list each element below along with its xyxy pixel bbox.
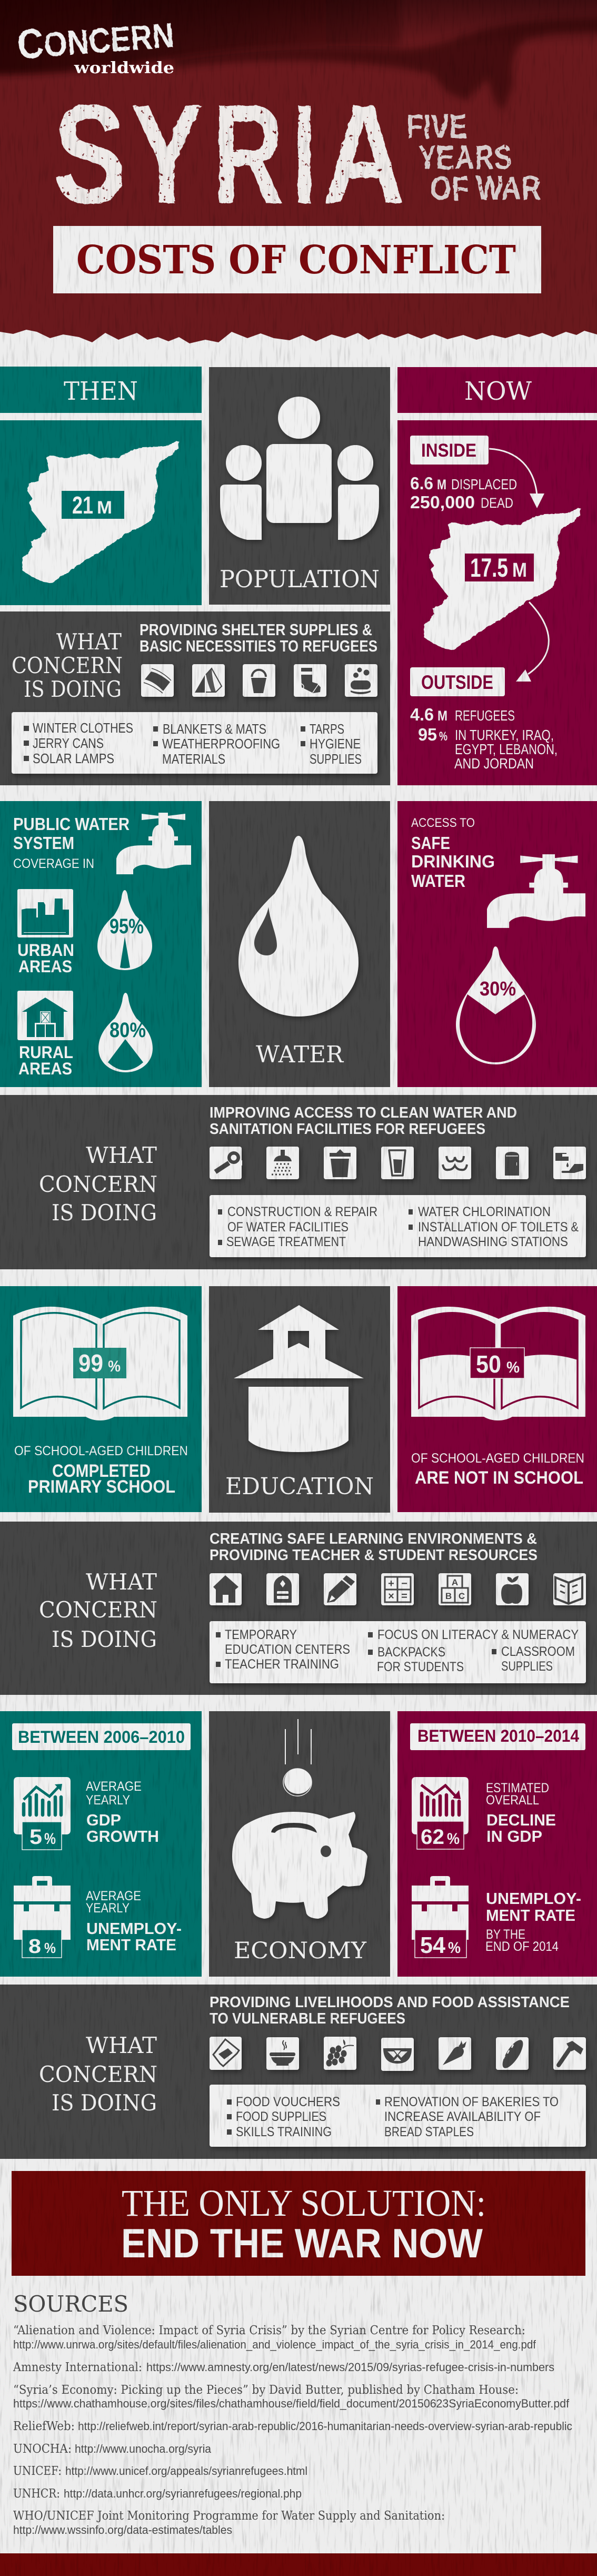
- subheading: safe learning: [210, 1531, 538, 1564]
- icon: briefcase with 54%: %: [448, 1939, 461, 1957]
- text: unemployment rate: [485, 1889, 581, 1954]
- text: decline in GDP: IN GDP: [486, 1827, 542, 1845]
- stat: 21M: 21: [72, 491, 93, 519]
- text: not in school: ARE NOT IN SCHOOL: [415, 1468, 583, 1488]
- panel: population: [209, 367, 390, 605]
- icon: citrus slice: [381, 2038, 414, 2071]
- chart: 95% drop: 95%: [110, 915, 144, 938]
- icon: jerry can: [324, 1147, 356, 1179]
- icon: briefcase with 54%: [412, 1876, 469, 1958]
- stats: displaced and dead: [410, 473, 517, 512]
- icon: briefcase with 8%: [14, 1876, 71, 1958]
- text: completed primary school: COMPLETED: [52, 1461, 151, 1481]
- list box: water: [210, 1195, 586, 1257]
- heading: public water system: [13, 814, 130, 871]
- heading: safe drinking water: ACCESS TO: [411, 816, 475, 830]
- label: outside: [410, 667, 505, 696]
- text block: source list: WHO/UNICEF Joint Monitoring Programme for Water Supply and Sanitation:: [13, 2509, 445, 2523]
- label: outside: OUTSIDE: [421, 672, 493, 693]
- text block: source list: ReliefWeb:: [13, 2420, 75, 2433]
- text: decline in GDP: [486, 1781, 556, 1845]
- icon: sock: [294, 664, 326, 697]
- heading: what concern is doing: CONCERN: [39, 1171, 157, 1197]
- text block: source list: UNOCHA:: [13, 2442, 72, 2456]
- list box: water: OF WATER FACILITIES: [227, 1220, 349, 1235]
- icon: city: [17, 889, 73, 937]
- list box: food: BREAD STAPLES: [384, 2125, 474, 2139]
- panel: then education: [0, 1286, 202, 1512]
- list box: education: TEACHER TRAINING: [225, 1657, 339, 1672]
- icon: briefcase with 8%: 8: [28, 1936, 41, 1958]
- icon: alphabet blocks: C: [459, 1591, 465, 1601]
- heading: sources: SOURCES: [13, 2291, 128, 2317]
- icon: water waves: [439, 1147, 471, 1179]
- list box: water: SEWAGE TREATMENT: [226, 1235, 346, 1249]
- heading: public water system: PUBLIC WATER: [13, 814, 130, 834]
- stat: 99%: 99: [78, 1349, 103, 1377]
- column header: then: [0, 367, 202, 413]
- text: GDP growth: YEARLY: [86, 1793, 130, 1808]
- stats: refugees: M: [437, 708, 447, 724]
- map: Syria 17.5M: [424, 508, 581, 650]
- label: between 2006-2010: BETWEEN 2006–2010: [18, 1728, 185, 1746]
- costs of conflict title box: [53, 226, 541, 293]
- list box: food: FOOD SUPPLIES: [236, 2109, 326, 2124]
- icon: water drop: [238, 836, 359, 1016]
- stat: 99%: [73, 1348, 126, 1378]
- icon: three people: [220, 397, 379, 540]
- list box: education: BACKPACKS: [377, 1645, 445, 1660]
- text: decline in GDP: DECLINE: [486, 1811, 556, 1829]
- list box: water: HANDWASHING STATIONS: [418, 1235, 568, 1249]
- text: GDP growth: [86, 1779, 159, 1845]
- subtitle: five years of war: [406, 107, 541, 207]
- column header: now: NOW: [464, 377, 532, 406]
- heading: what concern is doing: WHAT: [56, 629, 122, 655]
- label: urban areas: URBAN: [17, 941, 74, 960]
- text: unemployment rate: END OF 2014: [485, 1939, 559, 1954]
- heading: safe drinking water: [411, 816, 495, 891]
- panel: education: [209, 1286, 390, 1513]
- list box: water: INSTALLATION OF TOILETS &: [418, 1220, 579, 1235]
- heading: public water system: COVERAGE IN: [13, 856, 94, 871]
- chart: 80% drop: [98, 993, 153, 1072]
- title: Syria: Y: [131, 75, 203, 233]
- icon: soap: [345, 664, 377, 697]
- icon: briefcase with 54%: 54: [420, 1932, 446, 1958]
- panel: economy: ECONOMY: [234, 1938, 367, 1964]
- panel: now water: [397, 801, 597, 1087]
- icon: grapes: [324, 2037, 356, 2070]
- icon: wrench: [210, 1147, 242, 1179]
- icon: open book: [13, 1307, 187, 1420]
- text: decline in GDP: ESTIMATED: [486, 1781, 549, 1795]
- text: unemployment rate: MENT RATE: [86, 1936, 176, 1954]
- icon: math symbols: −: [401, 1578, 407, 1590]
- icon: growth chart with 5%: [14, 1777, 71, 1850]
- list box: shelter supplies: WEATHERPROOFING: [162, 736, 280, 752]
- text: GDP growth: AVERAGE: [86, 1779, 142, 1794]
- subheading: shelter supplies: BASIC NECESSITIES TO REFUGEES: [140, 637, 377, 655]
- icon: school: [234, 1305, 364, 1452]
- subtitle: five years of war: OF WAR: [430, 169, 541, 207]
- panel: water: WATER: [256, 1041, 344, 1068]
- stats: refugees: AND JORDAN: [454, 755, 534, 772]
- arrow: map to outside: [516, 602, 549, 682]
- subheading: livelihoods: TO VULNERABLE REFUGEES: [210, 2010, 405, 2027]
- chart: 80% drop: 80%: [110, 1019, 146, 1042]
- icon: piggy bank: [232, 1812, 367, 1919]
- text block: source list: http://www.unrwa.org/sites/default/files/alienation_and_violence_impact_of_the_syria_crisis_in_2014_eng.pdf: [13, 2338, 536, 2351]
- heading: what concern is doing: [39, 1569, 157, 1652]
- subheading: clean water: [210, 1104, 517, 1138]
- list box: shelter supplies: WINTER CLOTHES: [33, 720, 133, 736]
- logo: CONCERN: [15, 9, 175, 68]
- list box: education: FOR STUDENTS: [377, 1660, 464, 1674]
- heading: what concern is doing: CONCERN: [12, 653, 123, 678]
- icon: tent: [192, 664, 225, 697]
- stat: 21M: M: [97, 498, 112, 518]
- stats: refugees: IN TURKEY, IRAQ,: [455, 727, 554, 743]
- subheading: livelihoods: [210, 1994, 570, 2027]
- panel: what concern is doing, shelter: [0, 611, 390, 785]
- list box: food: RENOVATION OF BAKERIES TO: [384, 2095, 559, 2109]
- map: Syria 21M: [22, 441, 179, 583]
- list box: shelter supplies: BLANKETS & MATS: [163, 721, 266, 737]
- logo: worldwide: [74, 59, 174, 77]
- stats: refugees: %: [439, 729, 447, 744]
- icon: apple: [496, 1573, 529, 1605]
- subtitle: five years of war: YEARS: [418, 139, 512, 176]
- chart: 30% drop: 30%: [480, 978, 516, 1000]
- list box: shelter supplies: MATERIALS: [162, 751, 225, 767]
- subheading: safe learning: CREATING SAFE LEARNING ENVIRONMENTS &: [210, 1531, 537, 1547]
- panel: then water: [0, 801, 202, 1087]
- subheading: clean water: SANITATION FACILITIES FOR REFUGEES: [210, 1121, 485, 1138]
- subtitle: five years of war: FIVE: [406, 107, 467, 145]
- text block: source list: UNHCR:: [13, 2487, 60, 2501]
- title: Syria: [53, 75, 405, 233]
- stat: 17.5M: 17.5: [470, 553, 508, 583]
- text block: source list: https://www.amnesty.org/en/latest/news/2015/09/syrias-refugee-crisis-in-numbers: [146, 2361, 554, 2374]
- icon: alphabet blocks: A: [452, 1577, 458, 1587]
- chart: 30% drop: [456, 946, 536, 1064]
- text: not in school: [411, 1451, 584, 1488]
- heading: public water system: SYSTEM: [13, 833, 74, 853]
- stats: displaced and dead: DISPLACED: [451, 476, 517, 492]
- icon: hand washing: [553, 1147, 586, 1179]
- heading: what concern is doing: IS DOING: [24, 676, 122, 702]
- icon: faucet: [487, 854, 585, 928]
- icon: half-empty book: [411, 1307, 585, 1420]
- panel: population: POPULATION: [220, 565, 380, 593]
- icon: food voucher: [210, 2037, 242, 2070]
- panel: economy: [209, 1711, 390, 1977]
- list box: shelter supplies: SOLAR LAMPS: [33, 751, 114, 766]
- text: decline in GDP: OVERALL: [486, 1793, 539, 1808]
- stat: 50%: 50: [476, 1350, 501, 1378]
- subheading: livelihoods: PROVIDING LIVELIHOODS AND FOOD ASSISTANCE: [210, 1994, 570, 2011]
- label: inside: [410, 436, 489, 465]
- icon: hammer: [553, 2037, 586, 2070]
- heading: what concern is doing: CONCERN: [39, 1597, 157, 1623]
- icon: math symbols: ×: [388, 1591, 394, 1602]
- icon: alphabet blocks: [439, 1573, 471, 1605]
- title: Syria: I: [293, 75, 316, 233]
- stats: displaced and dead: 250,000: [410, 492, 475, 512]
- stat: 99%: %: [108, 1358, 121, 1375]
- text block: source list: “Syria’s Economy: Picking up the Pieces” by David Butter, published by Chatham House:: [13, 2383, 519, 2397]
- list box: shelter supplies: JERRY CANS: [33, 735, 104, 751]
- heading: safe drinking water: DRINKING: [411, 852, 495, 871]
- footer bar: [0, 2553, 597, 2576]
- chart: 95% drop: [97, 890, 152, 970]
- text block: source list: Amnesty International:: [13, 2361, 142, 2374]
- panel: now education: [397, 1286, 597, 1512]
- panel: now population: [397, 420, 597, 785]
- icon: carrot: [439, 2037, 471, 2070]
- text block: source list: https://www.chathamhouse.org/sites/files/chathamhouse/field/field_document/20150623SyriaEconomyButter.pdf: [13, 2397, 570, 2410]
- subheading: shelter supplies: PROVIDING SHELTER SUPPLIES &: [140, 620, 372, 639]
- heading: what concern is doing: [39, 2032, 157, 2116]
- label: rural areas: [18, 1043, 73, 1078]
- callout: end the war now: END THE WAR NOW: [121, 2220, 483, 2266]
- stats: refugees: 95: [418, 725, 437, 744]
- stat: 17.5M: M: [512, 559, 527, 581]
- text: completed primary school: PRIMARY SCHOOL: [28, 1477, 175, 1497]
- icon: decline chart with 62%: 62: [421, 1825, 444, 1849]
- stat: 21M: [62, 491, 124, 519]
- list box: food: SKILLS TRAINING: [236, 2125, 332, 2139]
- icon: bucket: [243, 664, 275, 697]
- label: between 2010-2014: BETWEEN 2010–2014: [417, 1726, 579, 1745]
- label: between 2010-2014: [410, 1723, 585, 1750]
- title: Syria: A: [322, 75, 405, 233]
- text block: source list: “Alienation and Violence: Impact of Syria Crisis” by the Syrian Centre for Policy Research:: [13, 2324, 525, 2337]
- list box: education: TEMPORARY: [225, 1627, 297, 1642]
- list box: shelter supplies: HYGIENE: [310, 736, 361, 752]
- icon: backpack: [266, 1573, 299, 1605]
- text: unemployment rate: UNEMPLOY-: [86, 1919, 182, 1938]
- title: Syria: R: [213, 75, 284, 233]
- heading: what concern is doing: [39, 1142, 157, 1226]
- stats: displaced and dead: M: [437, 477, 446, 492]
- list box: food: FOOD VOUCHERS: [236, 2095, 340, 2109]
- icon: blanket: [141, 664, 174, 697]
- callout: end the war now: [12, 2171, 585, 2276]
- label: between 2006-2010: [12, 1723, 191, 1750]
- icon: house: [210, 1573, 242, 1605]
- subheading: clean water: IMPROVING ACCESS TO CLEAN WATER AND: [210, 1104, 517, 1121]
- panel: water: [209, 801, 390, 1087]
- panel: now economy: [397, 1711, 597, 1977]
- list box: education: EDUCATION CENTERS: [225, 1642, 350, 1657]
- heading: what concern is doing: CONCERN: [39, 2061, 157, 2087]
- panel: then economy: [0, 1711, 202, 1977]
- text: completed primary school: [14, 1444, 188, 1497]
- list box: shelter supplies: [12, 712, 377, 774]
- panel: what concern is doing, livelihoods: [0, 1985, 597, 2159]
- icon: pencil: [324, 1573, 356, 1605]
- subheading: shelter supplies: [140, 620, 377, 655]
- text block: source list: http://reliefweb.int/report/syrian-arab-republic/2016-humanitarian-needs-overview-syrian-arab-republic: [78, 2420, 572, 2433]
- heading: what concern is doing: WHAT: [86, 1569, 157, 1595]
- list box: education: SUPPLIES: [501, 1659, 553, 1674]
- list box: food: INCREASE AVAILABILITY OF: [384, 2109, 541, 2124]
- stat: 50%: %: [506, 1359, 520, 1376]
- text block: source list: http://www.wssinfo.org/data-estimates/tables: [13, 2523, 232, 2536]
- text block: source list: [13, 2324, 572, 2536]
- title: Syria: S: [53, 75, 126, 233]
- icon: briefcase with 8%: %: [44, 1940, 56, 1956]
- stats: refugees: 4.6: [410, 705, 434, 724]
- icon: alphabet blocks: B: [445, 1591, 452, 1601]
- heading: what concern is doing: IS DOING: [52, 1626, 157, 1652]
- icon: growth chart with 5%: %: [44, 1830, 56, 1848]
- subheading: safe learning: PROVIDING TEACHER & STUDENT RESOURCES: [210, 1547, 538, 1564]
- heading: what concern is doing: IS DOING: [52, 1200, 157, 1226]
- header banner: [0, 0, 597, 343]
- text: unemployment rate: AVERAGE: [86, 1889, 141, 1903]
- heading: safe drinking water: WATER: [411, 871, 465, 891]
- label: urban areas: [17, 941, 74, 976]
- list box: water: WATER CHLORINATION: [418, 1205, 551, 1219]
- list box: food: [210, 2085, 586, 2147]
- heading: what concern is doing: IS DOING: [52, 2090, 157, 2116]
- icon: bread: [496, 2037, 529, 2071]
- stat: 50%: [470, 1348, 524, 1378]
- heading: what concern is doing: [12, 629, 123, 702]
- icon: latrine door: [496, 1147, 529, 1179]
- heading: what concern is doing: WHAT: [86, 1142, 157, 1168]
- icon: math symbols: =: [401, 1591, 407, 1602]
- text block: source list: http://www.unicef.org/appeals/syrianrefugees.html: [65, 2464, 307, 2478]
- panel: what concern is doing, education: [0, 1522, 597, 1695]
- icon: decline chart with 62%: %: [447, 1830, 460, 1848]
- heading: safe drinking water: SAFE: [411, 833, 450, 853]
- stats: refugees: REFUGEES: [455, 707, 515, 724]
- stats: displaced and dead: DEAD: [481, 495, 513, 511]
- text: not in school: OF SCHOOL-AGED CHILDREN: [411, 1451, 584, 1466]
- list box: water: CONSTRUCTION & REPAIR: [227, 1205, 377, 1219]
- label: rural areas: RURAL: [19, 1043, 73, 1062]
- dark grime and reaching hand: [0, 0, 597, 112]
- icon: decline chart with 62%: [412, 1777, 469, 1849]
- costs of conflict title box: COSTS OF CONFLICT: [76, 238, 516, 283]
- arrow: inside to map: [489, 449, 544, 508]
- icon: math symbols: +: [388, 1578, 394, 1590]
- text: GDP growth: GDP: [86, 1811, 121, 1829]
- list box: education: CLASSROOM: [501, 1644, 575, 1659]
- icon: growth chart with 5%: 5: [29, 1825, 42, 1849]
- text block: source list: http://www.unocha.org/syria: [75, 2442, 212, 2455]
- label: rural areas: AREAS: [18, 1059, 72, 1078]
- icon: barn: [17, 991, 73, 1040]
- panel: education: EDUCATION: [225, 1473, 374, 1500]
- icon: shower: [266, 1147, 299, 1179]
- text: unemployment rate: [86, 1889, 182, 1954]
- label: urban areas: AREAS: [18, 957, 72, 976]
- list box: education: [210, 1621, 586, 1683]
- list box: shelter supplies: SUPPLIES: [310, 751, 362, 767]
- callout: end the war now: THE ONLY SOLUTION:: [122, 2182, 486, 2224]
- text: unemployment rate: YEARLY: [86, 1901, 130, 1916]
- icon: falling coin: [283, 1719, 312, 1796]
- icon: open workbook: [553, 1573, 586, 1605]
- list box: shelter supplies: TARPS: [310, 721, 344, 737]
- text block: source list: UNICEF:: [13, 2464, 62, 2478]
- icon: soup bowl: [266, 2037, 299, 2070]
- icon: math symbols: [381, 1573, 414, 1605]
- panel: then population: [0, 420, 202, 605]
- stats: refugees: EGYPT, LEBANON,: [455, 741, 558, 757]
- text block: source list: http://data.unhcr.org/syrianrefugees/regional.php: [64, 2487, 302, 2500]
- icon: faucet: [116, 813, 191, 874]
- label: inside: INSIDE: [421, 440, 476, 461]
- text: completed primary school: OF SCHOOL-AGED CHILDREN: [14, 1444, 188, 1458]
- column header: then: THEN: [64, 377, 138, 406]
- icon: drinking glass: [381, 1147, 414, 1179]
- stats: refugees: [410, 705, 558, 772]
- text: unemployment rate: MENT RATE: [486, 1906, 575, 1924]
- text: GDP growth: GROWTH: [86, 1827, 159, 1845]
- stats: displaced and dead: 6.6: [410, 473, 433, 493]
- column header: now: [397, 367, 597, 413]
- text: unemployment rate: BY THE: [486, 1927, 525, 1942]
- panel: what concern is doing, water: [0, 1095, 597, 1269]
- text: unemployment rate: UNEMPLOY-: [486, 1889, 581, 1908]
- heading: what concern is doing: WHAT: [86, 2032, 157, 2058]
